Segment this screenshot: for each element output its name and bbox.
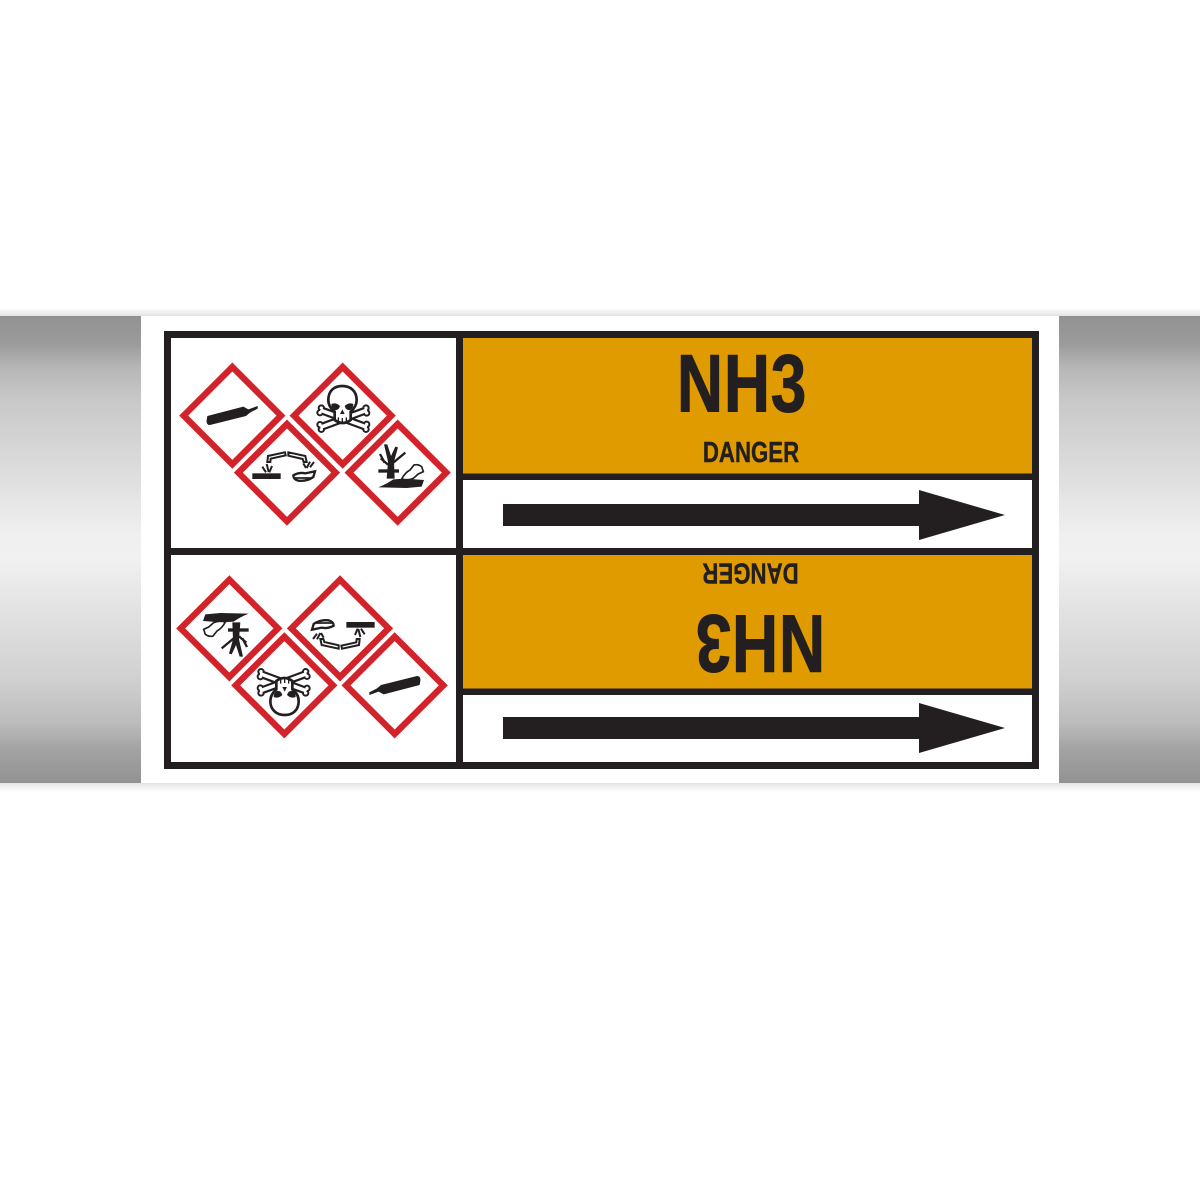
- panel: lower hazard symbols cell: [171, 555, 456, 762]
- panel: lower arrow band: [463, 695, 1032, 762]
- lower GHS pictogram group, rotated 180 degrees: [181, 580, 443, 734]
- icon: corrosion: [238, 424, 336, 521]
- white label base: [141, 317, 1059, 783]
- left pipe section: [0, 316, 141, 783]
- icon: skull and crossbones, upside down: [236, 637, 333, 734]
- icon: environmental hazard: [349, 424, 446, 521]
- heading: NH3 upper: NH3: [677, 337, 807, 429]
- icon: skull and crossbones: [294, 367, 391, 464]
- right pipe section: [1059, 316, 1200, 783]
- panel: upper hazard symbols cell: [171, 338, 456, 548]
- text: DANGER upper: DANGER: [703, 437, 799, 469]
- icon: environmental hazard, upside down: [181, 580, 278, 677]
- icon: gas cylinder: [184, 367, 281, 464]
- upper GHS pictogram group: [184, 367, 446, 521]
- icon: corrosion, upside down: [291, 580, 389, 677]
- arrow: upper flow direction: [503, 490, 1005, 540]
- text: DANGER lower, upside down: DANGER: [702, 557, 799, 588]
- label frame: [164, 331, 1039, 769]
- icon: gas cylinder, upside down: [346, 637, 443, 734]
- arrow: lower flow direction: [503, 703, 1005, 753]
- heading: NH3 lower, upside down: NH3: [695, 598, 825, 690]
- panel: lower orange name band: [463, 555, 1032, 688]
- panel: upper arrow band: [463, 480, 1032, 548]
- panel: upper orange name band: [463, 338, 1032, 474]
